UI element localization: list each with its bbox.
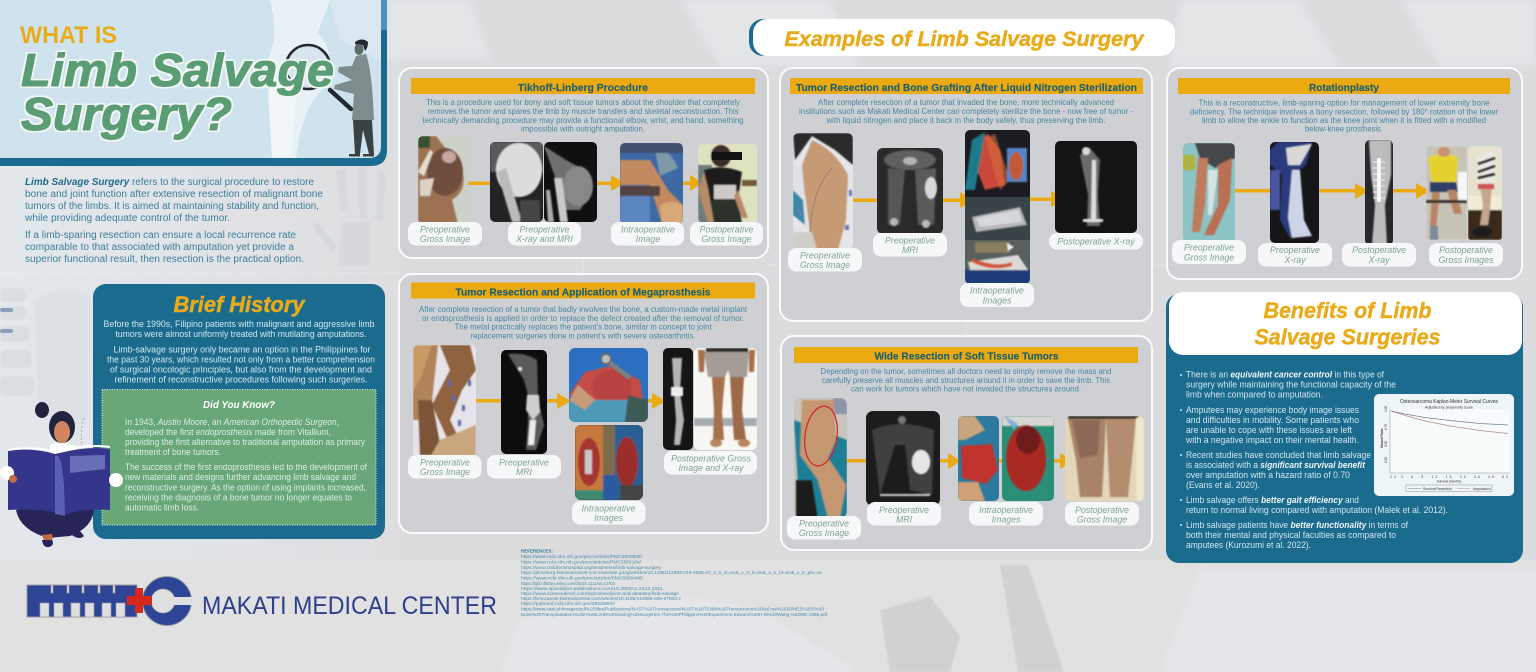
illustration: doctor xyxy=(334,40,374,156)
caption: Postoperative X-ray xyxy=(1057,236,1135,246)
caption: Preoperative xyxy=(799,518,849,528)
description: megaprosthesis xyxy=(419,305,748,340)
caption: Images xyxy=(594,513,624,523)
text block: history: tumors were almost uniformly treated with mutilating amputations. xyxy=(116,329,366,339)
description: wide resection: can work for tumors which have not invaded the structures around. xyxy=(851,384,1081,394)
caption xyxy=(960,283,1034,307)
photo: postoperative x-ray xyxy=(1365,140,1393,245)
references: https://bjsf.nlibrary.wiley.com/doi/10.1111/os.12702 xyxy=(521,581,615,586)
list: benefits: is associated with a significant survival benefit xyxy=(1186,460,1366,470)
caption xyxy=(969,502,1043,526)
arrow xyxy=(1393,183,1430,199)
list: benefits: Amputees may experience body image issues xyxy=(1186,405,1359,415)
callout: did you know: Did You Know? xyxy=(203,400,275,411)
text block: history: Before the 1990s, Filipino patients with malignant and aggressive limb xyxy=(104,319,375,329)
chart: osteosarcoma kaplan-meier survival curves: Osteosarcoma Kaplan-Meier Survival Curves xyxy=(1400,399,1498,405)
callout: did you know: receiving the diagnosis of a bone tumor no longer equates to xyxy=(125,492,352,502)
description: rotationplasty xyxy=(1190,98,1498,134)
description: wide resection: carefully preserve all muscles and structures around it in order to save the limb. This xyxy=(822,376,1110,385)
caption: Postoperative xyxy=(1075,505,1129,515)
photo: intraoperative megaprosthesis xyxy=(569,348,648,422)
photo: preoperative gross xyxy=(418,136,468,224)
illustration: woman reading a book xyxy=(0,402,123,547)
photo: mri thighs xyxy=(866,411,940,506)
references: https://www.childrenshospital.org/treatments/limb-salvage-surgery xyxy=(521,565,662,570)
photo: postoperative x-ray xyxy=(663,348,693,450)
callout: did you know: treatment of bone tumors. xyxy=(125,447,221,457)
caption: Preoperative xyxy=(420,224,470,234)
heading bar: wide resection xyxy=(794,347,1138,363)
text block: introduction: tumors of the limbs. It is aimed at maintaining stability and function, xyxy=(25,201,319,212)
list: benefits: (Evans et al. 2020). xyxy=(1186,480,1260,490)
heading: what is: WHAT IS xyxy=(20,22,117,49)
illustration: femur bone xyxy=(265,0,381,158)
arrow xyxy=(1235,189,1270,192)
heading: benefits: Salvage Surgeries xyxy=(1254,324,1440,350)
text block: history: the past 30 years, which resulted not only from a better comprehension xyxy=(107,354,375,364)
references: https://pubmed.ncbi.nlm.nih.gov/28220660/ xyxy=(521,601,616,606)
caption: Images xyxy=(992,514,1021,524)
caption: MRI xyxy=(516,467,533,477)
caption xyxy=(408,455,482,478)
description: wide resection xyxy=(820,367,1112,394)
caption: Intraoperative xyxy=(582,504,635,514)
photo: preoperative x-ray xyxy=(490,142,543,222)
callout: did you know: In 1943, Austin Moore, an American Orthopedic Surgeon, xyxy=(125,417,339,427)
list: benefits: Limb salvage patients have better functionality in terms of xyxy=(1186,520,1408,530)
description: tikhoff-linberg: This is a procedure used for bony and soft tissue tumors about the shoulder that completely xyxy=(426,98,740,107)
description: tikhoff-linberg: impossible with outright amputation. xyxy=(521,124,645,134)
panel: liquid nitrogen bone grafting xyxy=(780,68,1152,321)
caption: X-ray xyxy=(1283,255,1306,265)
caption: Gross Image xyxy=(799,528,849,538)
references: https://www.ncbi.nlm.nih.gov/pmc/articles/PMC5890448/ xyxy=(521,576,644,580)
panel: wide resection of soft tissue tumors xyxy=(781,336,1152,550)
heading bar: liquid nitrogen: Tumor Resection and Bone Grafting After Liquid Nitrogen Sterilization xyxy=(796,83,1137,94)
references xyxy=(521,548,828,617)
caption: X-ray xyxy=(1367,255,1390,265)
caption: Gross Image xyxy=(1077,514,1127,524)
caption: MRI xyxy=(902,245,919,255)
panel: brief history xyxy=(93,284,385,539)
caption: Preoperative xyxy=(420,458,470,468)
caption xyxy=(873,233,947,256)
caption: Gross Image xyxy=(701,234,752,244)
list: benefits: return to normal living compared with amputation (Malek et al. 2012). xyxy=(1186,505,1448,515)
description: megaprosthesis: After complete resection of a tumor that badly involves the bone, a custom-made metal implant xyxy=(419,305,748,314)
heading: benefits xyxy=(1169,292,1522,355)
chart: osteosarcoma kaplan-meier survival curves: Hazard Ratio xyxy=(1380,428,1384,448)
text block: introduction: comparable to that associated with amputation yet provide a xyxy=(25,242,295,253)
panel: tikhoff-linberg procedure xyxy=(399,68,768,258)
photo: postoperative legs xyxy=(1065,416,1144,501)
list: benefits: both their mental and physical faculties as compared to xyxy=(1186,530,1396,540)
description: tikhoff-linberg: technically demanding procedure may provide a functional elbow, wrist, and hand, something xyxy=(422,116,744,125)
references: https://bmccancer.biomedcentral.com/articles/10.1186/s12885-020-07502-z xyxy=(521,596,682,601)
caption: Gross Image xyxy=(420,467,470,477)
arrow xyxy=(648,393,666,409)
caption xyxy=(788,248,862,272)
list: benefits: with a negative impact on their mental health. xyxy=(1185,435,1359,445)
photo: intraoperative wound xyxy=(958,416,999,501)
photo: intraoperative and liquid nitrogen xyxy=(965,130,1030,284)
caption: Postoperative xyxy=(1439,245,1493,255)
photo: preoperative x-ray xyxy=(1270,142,1319,243)
list: benefits: surgery while maintaining the functional capacity of the xyxy=(1186,380,1396,390)
description: rotationplasty: This is a reconstructive, limb-sparing option for management of lower extremity bone xyxy=(1198,98,1490,108)
caption xyxy=(1342,243,1416,266)
section heading: examples of limb salvage surgery: Examples of Limb Salvage Surgery xyxy=(784,27,1145,51)
chart: osteosarcoma kaplan-meier survival curves xyxy=(1374,394,1514,496)
description: rotationplasty: limb to allow the ankle to function as the knee joint when it is fitted with a modified xyxy=(1202,116,1486,125)
text block: history: of surgical oncologic principles, but also from the development and xyxy=(110,364,372,374)
callout: did you know xyxy=(102,390,376,525)
arrow xyxy=(1054,453,1073,469)
list: benefits: There is an equivalent cancer control in this type of xyxy=(1186,370,1384,380)
photo: mri pelvis xyxy=(877,148,943,234)
arrow xyxy=(468,182,490,185)
description: megaprosthesis: replacement surgeries done in patient's with severe osteoarthritis. xyxy=(470,332,696,340)
description: megaprosthesis: or endoprosthesis is applied in order to replace the defect created after the removal of tumor. xyxy=(422,314,744,323)
photo: gross thigh with marked tumor xyxy=(794,398,847,518)
logo: makati medical center xyxy=(27,576,497,626)
caption: Preoperative xyxy=(885,236,935,246)
references: https://www.sciencedirect.com/topics/medicine-and-dentistry/limb-salvage xyxy=(521,591,680,596)
caption xyxy=(1429,243,1503,266)
caption: Gross Image xyxy=(420,234,470,244)
list: benefits: limb when compared to amputation. xyxy=(1186,390,1323,400)
photo: postoperative legs xyxy=(694,348,757,450)
text block: introduction: superior functional result, then resection is the practical option. xyxy=(25,254,304,265)
caption xyxy=(1049,233,1143,250)
description: rotationplasty: below-knee prosthesis. xyxy=(1305,124,1383,134)
description: tikhoff-linberg xyxy=(422,98,744,134)
heading bar: rotationplasty xyxy=(1178,78,1510,94)
description: liquid nitrogen xyxy=(799,98,1133,125)
list: benefits: Recent studies have concluded that limb salvage xyxy=(1186,450,1371,460)
references: https://www.nast.ph/images/pdf%20files/Publications/NAST%20Transactions/NAST%20T1998%20Transactions%20Vol.me%2020/HES%203%20 xyxy=(521,606,825,612)
text block: introduction: Limb Salvage Surgery refers to the surgical procedure to restore xyxy=(25,177,315,188)
photo: gross legs xyxy=(1183,143,1235,242)
caption: Gross Image xyxy=(1184,252,1234,262)
photo: preoperative mri xyxy=(544,142,597,222)
photo: gross legs xyxy=(413,345,476,457)
heading bar: megaprosthesis xyxy=(411,282,755,298)
chart legend: Amputation xyxy=(1473,487,1491,491)
caption: Intraoperative xyxy=(979,505,1033,515)
chart: osteosarcoma kaplan-meier survival curves: 0.50 xyxy=(1384,441,1388,447)
photo: mri xyxy=(501,350,547,454)
photo: gross thigh xyxy=(793,133,853,250)
callout: did you know: automatic limb loss. xyxy=(125,502,199,512)
text block: history xyxy=(104,319,375,384)
arrow xyxy=(597,175,625,191)
references: https://www.spandidos-publications.com/10.3892/or.2012.2021 xyxy=(521,586,664,591)
panel: tumor resection and megaprosthesis xyxy=(399,274,768,533)
arrow xyxy=(547,393,571,409)
logo: makati medical center: MAKATI MEDICAL CENTER xyxy=(202,592,497,620)
caption: Preoperative xyxy=(520,224,570,234)
list: benefits: and difficulties in mobility. Some patients who xyxy=(1186,415,1359,425)
chart: osteosarcoma kaplan-meier survival curves: 1.00 xyxy=(1384,406,1388,412)
caption: MRI xyxy=(896,514,913,524)
icon: magnifying glass xyxy=(286,45,351,109)
list: benefits: are unable to cope with these issues are left xyxy=(1186,425,1352,435)
chart: osteosarcoma kaplan-meier survival curves: 0.25 xyxy=(1384,457,1388,463)
heading: benefits: Benefits of Limb xyxy=(1264,298,1432,323)
caption: Preoperative xyxy=(800,250,850,260)
caption xyxy=(787,516,861,540)
caption: Intraoperative xyxy=(970,286,1024,296)
chart: osteosarcoma kaplan-meier survival curves: 24 3 6 9 12 18 24 36 48 60 xyxy=(1390,475,1508,479)
references: Bone%20Transplantation%20in%20Limb%20Saving%20Surgeries.The%20Philippine%20Experience,Edward%20H.M%20Wang,%20MD,1998.pdf xyxy=(521,612,828,617)
heading: limb salvage surgery xyxy=(21,44,334,140)
heading bar: wide resection: Wide Resection of Soft Tissue Tumors xyxy=(874,352,1059,362)
caption xyxy=(408,222,482,246)
caption: Preoperative xyxy=(499,458,549,468)
panel: rotationplasty xyxy=(1167,68,1522,279)
references: https://www.ncbi.nlm.nih.gov/pmc/articles/PMC5900908/ xyxy=(521,554,643,559)
panel: benefits of limb salvage surgeries xyxy=(1166,292,1523,563)
chart: osteosarcoma kaplan-meier survival curves: 0.75 xyxy=(1384,424,1388,430)
callout: did you know: developed the first endoprosthesis made from Vitallium, xyxy=(125,427,331,437)
chart: osteosarcoma kaplan-meier survival curves: Adjusted by propensity score xyxy=(1425,406,1473,410)
heading bar: liquid nitrogen xyxy=(790,78,1143,94)
arrow xyxy=(1319,183,1369,199)
caption: Postoperative xyxy=(700,224,753,234)
callout: did you know: providing the first alternative to traditional amputation as primary xyxy=(125,437,366,447)
references: REFERENCES: xyxy=(521,548,553,554)
caption xyxy=(664,451,757,474)
curve: amputation xyxy=(1391,411,1508,434)
chart legend xyxy=(1406,485,1492,492)
caption: Image xyxy=(636,234,660,244)
caption: Postoperative xyxy=(1352,245,1406,255)
references: https://jbmesurg-biomedcentral-com.translate.goog/articles/10.1186/s12893-019-0589-3?_x_tr_sl=es&_x_tr_tl=en&_x_tr_hl=en&_x_tr_pto=sc xyxy=(521,570,823,575)
arrow xyxy=(683,175,703,191)
list: benefits: over amputation with a hazard ratio of 0.70 xyxy=(1186,470,1350,480)
heading: brief history: Brief History xyxy=(174,292,306,317)
arrow xyxy=(999,459,1002,462)
chart legend: Survival Resection xyxy=(1423,487,1452,491)
description: liquid nitrogen: institutions such as Makati Medical Center can completely sterilize the bone - now free of tumor - xyxy=(799,107,1133,116)
arrow xyxy=(940,453,961,469)
arrow xyxy=(476,399,501,402)
heading: limb salvage surgery: Surgery? xyxy=(21,88,232,140)
callout: did you know: new materials and designs further advancing limb salvage and xyxy=(125,472,356,482)
caption: Gross Images xyxy=(1439,255,1494,265)
caption: Images xyxy=(983,296,1012,306)
description: megaprosthesis: The metal practically replaces the patient's bone, similar in concept to joint xyxy=(454,322,712,332)
text block: introduction: If a limb-sparing resection can ensure a local recurrence rate xyxy=(25,230,297,241)
caption xyxy=(1172,240,1246,264)
section heading: examples of limb salvage surgery xyxy=(749,19,1175,56)
callout: did you know: reconstructive surgery. As the option of using implants increased, xyxy=(125,482,366,492)
caption: Image and X-ray xyxy=(678,463,744,473)
references: https://www.ncbi.nlm.nih.gov/pmc/articles/PMC5569104/ xyxy=(521,560,642,564)
caption xyxy=(572,501,646,524)
description: wide resection: Depending on the tumor, sometimes all doctors need to simply remove the mass and xyxy=(820,367,1112,376)
photo: postoperative seated xyxy=(1426,146,1467,240)
caption xyxy=(1258,243,1332,266)
callout: did you know: The success of the first endoprosthesis led to the development of xyxy=(125,462,368,472)
text block: history: Limb-salvage surgery only became an option in the Philippines for xyxy=(114,344,371,354)
caption: Preoperative xyxy=(1184,242,1234,252)
description: tikhoff-linberg: removes the tumor and spares the limb by muscle transfers and skeletal reconstruction. This xyxy=(428,107,739,116)
caption xyxy=(690,222,763,246)
arrow xyxy=(853,198,877,202)
arrow xyxy=(1030,191,1065,207)
header panel: what is limb salvage surgery xyxy=(0,0,387,166)
description: liquid nitrogen: with liquid nitrogen and place it back in the body safely, thus preserving the limb. xyxy=(825,116,1106,125)
caption: Postoperative Gross xyxy=(671,454,751,464)
list: benefits: amputees (Kurozumi et al. 2022). xyxy=(1186,540,1311,550)
heading bar: megaprosthesis: Tumor Resection and Application of Megaprosthesis xyxy=(456,288,711,298)
heading bar: tikhoff-linberg: Tikhoff-Linberg Procedure xyxy=(518,83,648,94)
photo: intraoperative image xyxy=(620,143,683,224)
curve: survival resection xyxy=(1391,411,1508,425)
heading bar: tikhoff-linberg xyxy=(411,78,755,94)
caption xyxy=(508,222,581,246)
caption xyxy=(611,222,684,246)
text block: introduction xyxy=(24,177,324,265)
caption xyxy=(487,455,561,478)
chart: osteosarcoma kaplan-meier survival curves: Survival (months) xyxy=(1437,480,1461,484)
caption: Preoperative xyxy=(1270,245,1320,255)
text block: introduction: while providing adequate control of the tumor. xyxy=(24,213,230,224)
arrow xyxy=(847,459,866,462)
photo: postoperative gross xyxy=(698,144,757,223)
text block: introduction: bone and joint function after extensive resection of malignant bone xyxy=(25,189,324,200)
description: rotationplasty: deficiency. The technique involves a bony resection, followed by 180° rotation of the lower xyxy=(1190,108,1498,116)
photo: excised specimen xyxy=(1002,416,1054,501)
photo: intraoperative limbs xyxy=(575,425,643,500)
caption xyxy=(1065,502,1139,526)
list: benefits xyxy=(1180,370,1448,550)
photo: postoperative x-ray xyxy=(1055,141,1137,233)
caption: Gross Image xyxy=(800,260,850,270)
heading bar: rotationplasty: Rotationplasty xyxy=(1309,83,1379,94)
text block: history: refinement of reconstructive procedures following such surgeries. xyxy=(114,374,368,384)
list: benefits: Limb salvage offers better gait efficiency and xyxy=(1186,495,1359,505)
caption: X-ray and MRI xyxy=(515,234,573,244)
photo: postoperative standing xyxy=(1468,146,1502,240)
arrow xyxy=(943,192,974,208)
heading: limb salvage surgery: Limb Salvage xyxy=(21,44,334,96)
caption xyxy=(867,502,941,526)
description: liquid nitrogen: After complete resection of a tumor that invaded the bone, more technically advanced xyxy=(818,98,1114,107)
caption: Preoperative xyxy=(879,505,929,515)
caption: Intraoperative xyxy=(621,224,675,234)
